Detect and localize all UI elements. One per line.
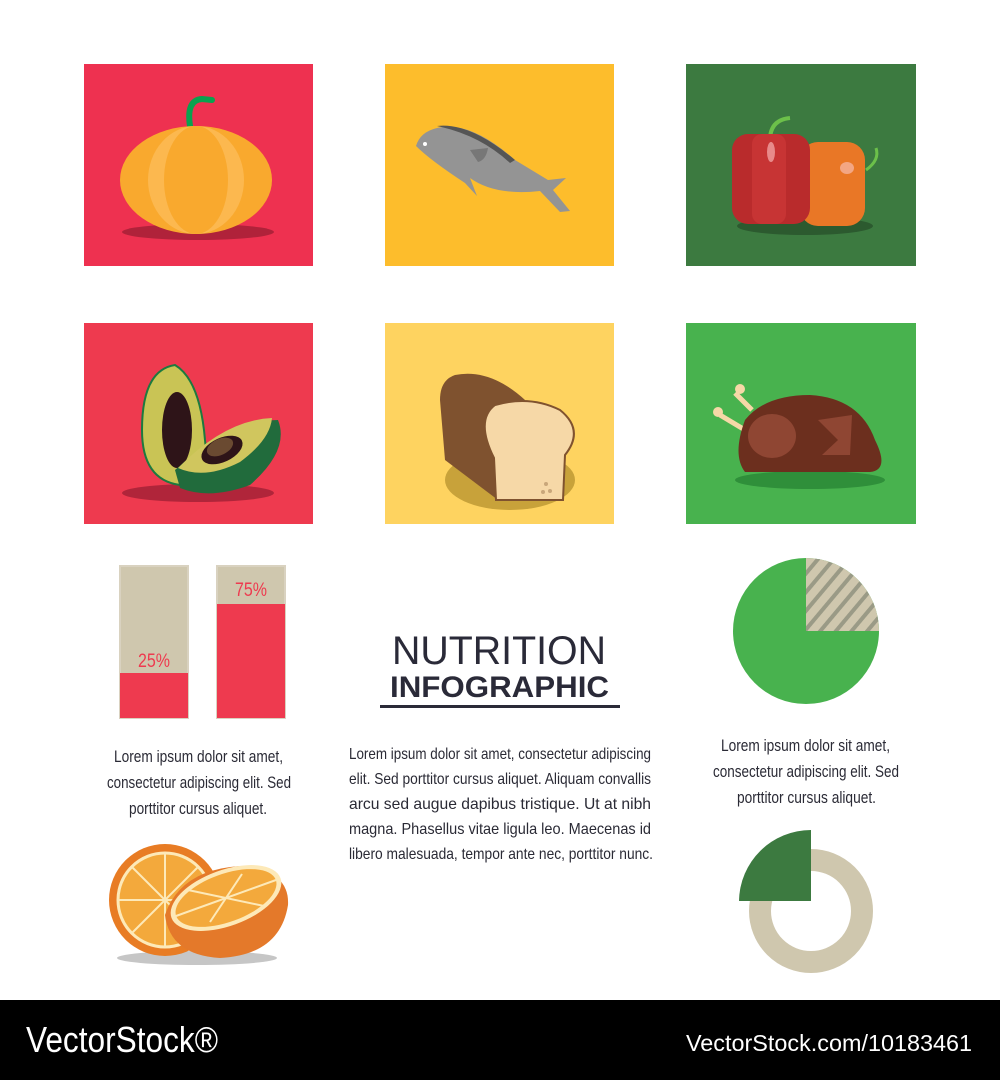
title: INFOGRAPHIC (390, 671, 609, 704)
chart: pie (733, 558, 879, 704)
text block: center: magna. Phasellus vitae ligula leo. Maecenas id (349, 821, 651, 838)
text block: left: Lorem ipsum dolor sit amet, (114, 747, 283, 766)
icon: oranges (109, 844, 290, 965)
footer (0, 1000, 1000, 1080)
panel: bread (385, 323, 614, 524)
panel: avocado (84, 323, 313, 524)
footer: VectorStock® (26, 1019, 218, 1060)
chart: bar 75%: 75% (235, 580, 267, 601)
text block: left (107, 747, 291, 818)
text block: center: arcu sed augue dapibus tristique. Ut at nibh (349, 796, 651, 813)
text block: center: Lorem ipsum dolor sit amet, consectetur adipiscing (349, 746, 651, 763)
title (380, 629, 620, 708)
text block: right (713, 736, 899, 807)
chart: bar 25%: 25% (138, 651, 170, 672)
text block: center: libero malesuada, tempor ante nec, porttitor nunc. (349, 846, 653, 863)
text block: center (349, 746, 653, 863)
panel: fish (385, 64, 614, 266)
panel: pumpkin (84, 64, 313, 266)
text block: left: consectetur adipiscing elit. Sed (107, 773, 291, 792)
chart: donut (739, 830, 862, 962)
text block: center: elit. Sed porttitor cursus aliquet. Aliquam convallis (349, 771, 651, 788)
text block: right: Lorem ipsum dolor sit amet, (721, 736, 890, 755)
text block: left: porttitor cursus aliquet. (129, 799, 267, 818)
text block: right: porttitor cursus aliquet. (737, 788, 876, 807)
title: NUTRITION (392, 629, 606, 673)
footer: VectorStock.com/10183461 (686, 1030, 972, 1056)
chart: bar 75% (217, 566, 285, 718)
text block: right: consectetur adipiscing elit. Sed (713, 762, 899, 781)
chart: bar 25% (120, 566, 188, 718)
panel: turkey (686, 323, 916, 524)
panel: peppers (686, 64, 916, 266)
